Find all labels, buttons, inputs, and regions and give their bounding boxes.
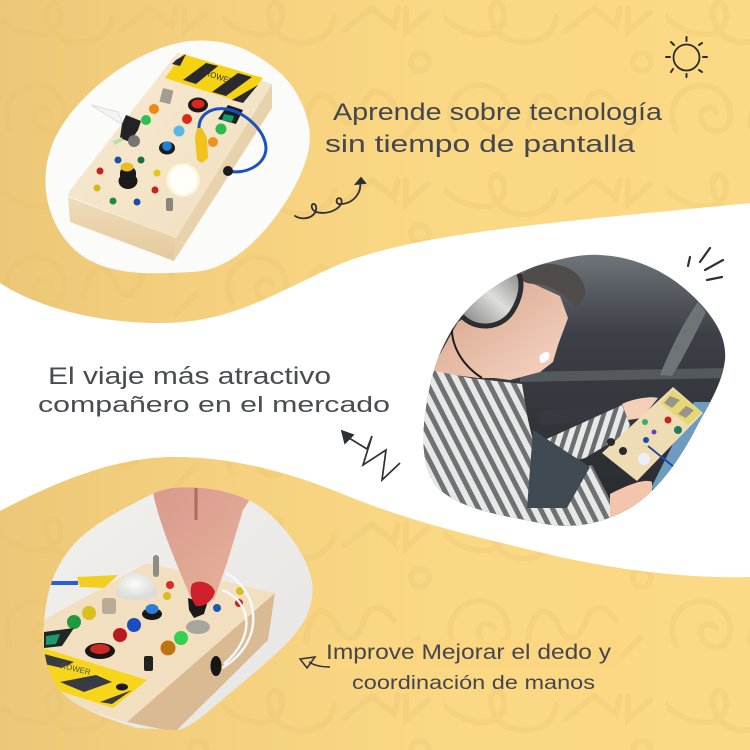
heading: bottom text: Improve Mejorar el dedo y (326, 641, 612, 664)
icon: zigzag arrow (342, 431, 400, 480)
metal toggle (166, 198, 173, 211)
LED lights (94, 104, 226, 206)
yellow plug and blue wire (51, 575, 118, 588)
panel: child photo (420, 250, 730, 535)
photo backdrop (40, 485, 320, 735)
key and silver tag (91, 105, 141, 147)
green rocker switch (218, 105, 243, 124)
wooden busy board (68, 53, 272, 261)
icon: spark lines (688, 248, 723, 280)
sleeve stripes on forearm (546, 405, 630, 460)
panel: white wave band (0, 203, 750, 577)
LEDs and buttons (44, 581, 244, 671)
board side (127, 593, 275, 732)
heading: bottom text (326, 641, 612, 694)
heading: middle text: El viaje más atractivo (48, 363, 331, 390)
small toggle switch (159, 88, 174, 104)
small busy board in child's hands (602, 387, 703, 481)
yellow plate (43, 648, 147, 708)
text highlight patch (325, 640, 621, 670)
heading: middle text (38, 363, 390, 417)
photo blob: white backdrop (45, 40, 310, 273)
heading: top text (325, 99, 663, 158)
car interior background (420, 250, 730, 535)
yellow striped plate: ROWER (203, 68, 236, 86)
icon: curly arrow (295, 178, 365, 218)
button under finger (186, 598, 210, 634)
yellow plate: ROWER (60, 661, 92, 677)
blue cable and yellow plug (195, 109, 266, 176)
dark denim apron (527, 430, 590, 508)
white cable (222, 573, 253, 668)
panel: top product photo (45, 40, 310, 273)
board top (40, 563, 275, 722)
headphones (452, 273, 521, 378)
heading: middle text: compañero en el mercado (38, 392, 390, 417)
blue push button (159, 141, 175, 154)
knob (118, 162, 138, 189)
heading: bottom text: coordinación de manos (352, 673, 595, 694)
panel: hand pressing button photo (40, 485, 320, 735)
toggle post (153, 555, 159, 577)
cable port (210, 656, 222, 676)
child hair (519, 264, 585, 307)
icon: sun (666, 37, 707, 77)
red push button (188, 98, 208, 112)
heading: top text: Aprende sobre tecnología (333, 99, 663, 126)
hands and blue jeans (610, 397, 712, 517)
glowing dome light (166, 163, 200, 197)
dome light (116, 573, 158, 600)
striped sweater (420, 370, 618, 530)
heading: top text: sin tiempo de pantalla (325, 131, 636, 158)
hand and red nail (152, 485, 256, 606)
icon: left arrow (300, 657, 330, 668)
child neck and face (430, 280, 568, 380)
yellow striped plate (165, 54, 263, 103)
